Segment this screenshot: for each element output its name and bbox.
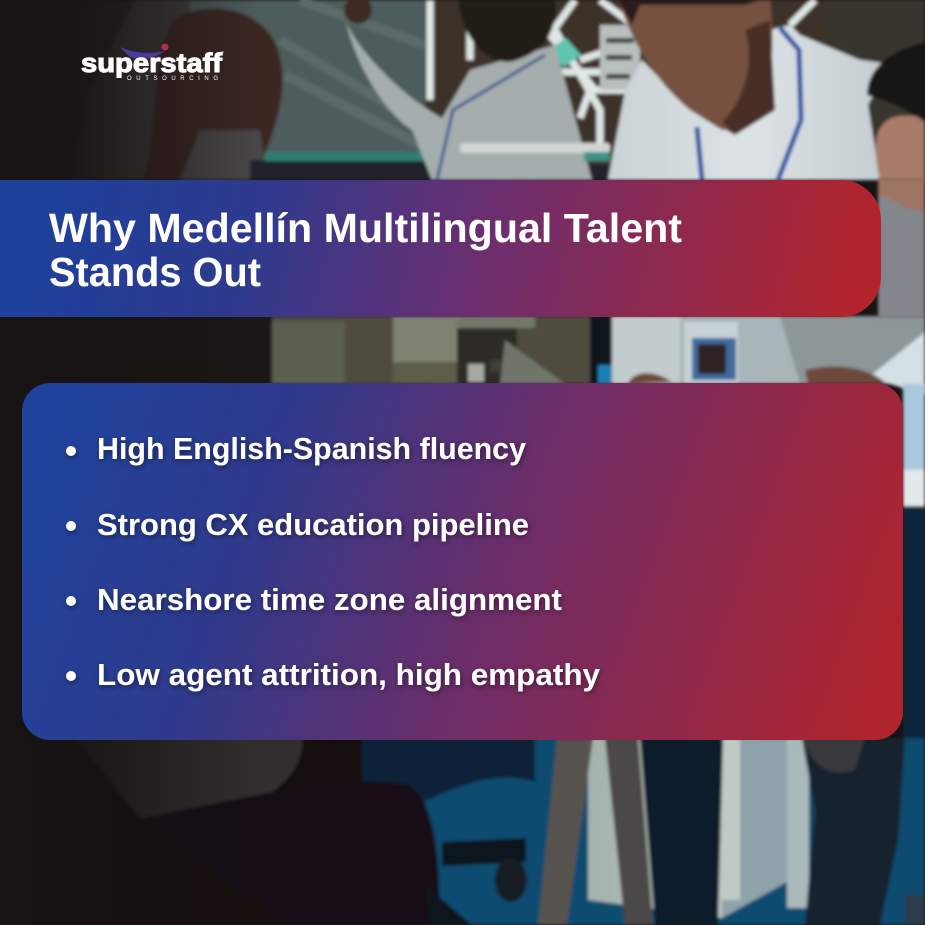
panel: benefits list bbox=[22, 383, 903, 740]
seated person and chair bbox=[0, 738, 362, 925]
bullet: High English-Spanish fluency: High English-Spanish fluency bbox=[97, 431, 527, 466]
filing cabinet bbox=[588, 738, 740, 918]
right edge: face, shirt and sleeve bbox=[878, 178, 925, 740]
logo: superstaff outsourcing bbox=[81, 44, 224, 82]
logo wordmark: superstaff bbox=[81, 48, 223, 78]
photo bottom: chair, easel, cabinet, jeans, carpet bbox=[0, 738, 925, 925]
carpet bbox=[425, 738, 925, 925]
bullet: Strong CX education pipeline: Strong CX education pipeline bbox=[97, 507, 529, 542]
bullet: Nearshore time zone alignment: Nearshore time zone alignment bbox=[97, 582, 562, 617]
woman at right bbox=[876, 116, 925, 180]
bullet: Low agent attrition, high empathy: Low agent attrition, high empathy bbox=[97, 657, 601, 692]
jeans bbox=[640, 738, 723, 925]
screen with network graphic bbox=[425, 0, 825, 165]
man in white shirt bbox=[608, 25, 890, 180]
logo tagline: OUTSOURCING bbox=[127, 76, 218, 82]
panel: title banner bbox=[0, 180, 881, 317]
title: Stands Out bbox=[49, 249, 261, 295]
title: Why Medellín Multilingual Talent bbox=[49, 205, 682, 251]
logo swoosh icon bbox=[120, 44, 168, 59]
logo registered mark: ® bbox=[221, 50, 224, 55]
photo middle: monitor and shirt bbox=[0, 316, 925, 395]
colleague at the wall bbox=[344, 0, 372, 24]
easel legs bbox=[538, 738, 593, 925]
photo top: back wall and colleagues bbox=[40, 0, 925, 180]
